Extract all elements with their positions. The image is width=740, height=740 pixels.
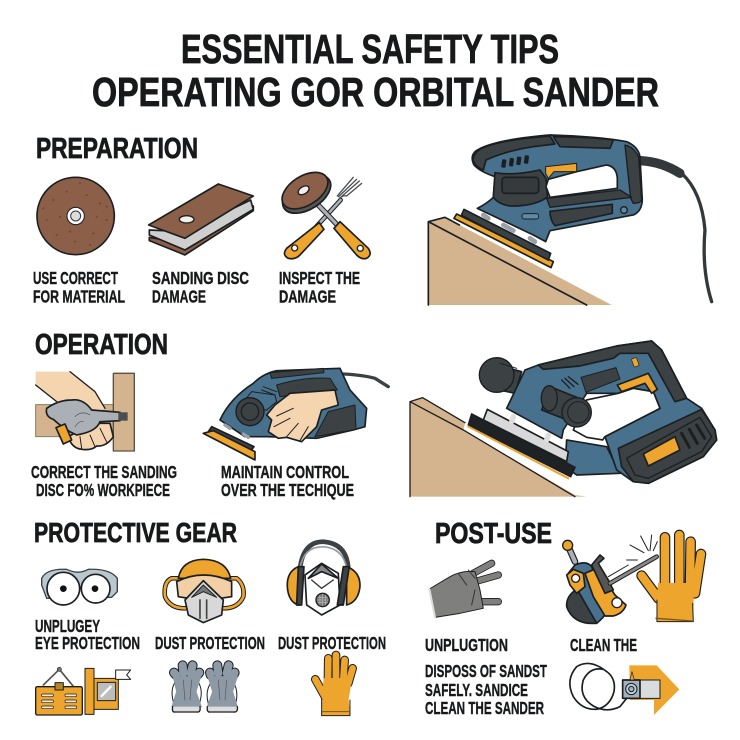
- vents and switch: [562, 357, 639, 392]
- label: sanding disc: [152, 268, 249, 306]
- label: sanding disc: SANDING DISC: [152, 268, 249, 288]
- battery pack: [618, 409, 717, 483]
- label: clean the: CLEAN THE: [570, 635, 637, 655]
- icon: inspection tools: [276, 165, 370, 259]
- icon: ear muffs and respirator: [287, 542, 360, 615]
- icon: hard hat and mask: [165, 559, 244, 623]
- heading: operation: OPERATION: [35, 329, 168, 361]
- heading: preparation: PREPARATION: [36, 133, 198, 165]
- label: eye protection: UNPLUGEY: [35, 616, 100, 636]
- label: dispose of sandpaper: CLEAN THE SANDER: [425, 698, 544, 718]
- icon: cleaning cycle arrow: [570, 663, 679, 715]
- rear knob: [479, 358, 522, 393]
- label: dispose of sandpaper: SAFELY. SANDICE: [425, 680, 528, 700]
- label: inspect the damage: DAMAGE: [279, 286, 336, 306]
- label: inspect the damage: INSPECT THE: [279, 268, 360, 288]
- trigger: [617, 373, 657, 393]
- handle opening: [573, 388, 660, 440]
- side panel: [550, 204, 612, 226]
- illustration: orbital sander on board: [428, 135, 712, 305]
- title: [92, 26, 659, 115]
- sanding plates: [468, 409, 575, 478]
- trigger: [546, 163, 577, 178]
- label: correct the sanding disc: DISC FO% WORKPIECE: [36, 480, 170, 500]
- panel: post-use: [425, 518, 701, 718]
- icon: grey glove unplugging: [429, 563, 498, 617]
- top grip: [538, 341, 687, 402]
- icon: hand on sander: [203, 368, 388, 460]
- tool body: [507, 341, 717, 483]
- label: correct the sanding disc: [31, 462, 177, 500]
- label: use correct: [33, 268, 125, 306]
- label: maintain control: OVER THE TECHIQUE: [221, 480, 354, 500]
- label: sanding disc: DAMAGE: [152, 286, 206, 306]
- handle opening: [546, 165, 617, 197]
- icon: toolbox and book: [36, 667, 131, 715]
- icon: gloved hand gripping tool: [36, 372, 134, 451]
- title: ESSENTIAL SAFETY TIPS: [181, 26, 559, 72]
- label: dispose of sandpaper: DISPOSS OF SANDST: [425, 661, 547, 681]
- label: dust protection 2: DUST PROTECTION: [278, 633, 386, 653]
- wood board: [428, 217, 612, 305]
- wood board: [410, 398, 587, 497]
- icon: sanding sheets: [149, 184, 253, 255]
- icon: cleaning tool and glove: [563, 535, 701, 623]
- sander body: [472, 135, 642, 242]
- power cord: [640, 161, 712, 302]
- label: use correct: FOR MATERIAL: [33, 286, 125, 306]
- front knob: [541, 386, 591, 427]
- panel: operation: [31, 329, 717, 500]
- label: inspect the damage: [279, 268, 360, 306]
- vents: [501, 155, 529, 168]
- heading: protective gear: PROTECTIVE GEAR: [34, 517, 237, 548]
- label: maintain control: [221, 462, 354, 500]
- label: dust protection 1: DUST PROTECTION: [155, 633, 265, 653]
- battery arm: [565, 440, 620, 475]
- motor housing: [493, 170, 547, 206]
- illustration: cordless sander on board: [410, 341, 717, 497]
- label: use correct: USE CORRECT: [33, 268, 118, 288]
- panel: preparation: [33, 133, 712, 306]
- label: eye protection: [35, 616, 140, 653]
- sanding pads: [454, 209, 553, 268]
- label: unplug: UNPLUGTION: [425, 635, 508, 655]
- rear handle dark: [625, 145, 642, 203]
- label: dispose of sandpaper: [425, 661, 547, 718]
- icon: goggles: [42, 569, 117, 605]
- icon: orange glove: [315, 655, 353, 716]
- heading: post-use: POST-USE: [435, 518, 552, 550]
- label: correct the sanding disc: CORRECT THE SANDING: [31, 462, 177, 482]
- top grip: [473, 136, 555, 170]
- label: eye protection: EYE PROTECTION: [35, 633, 140, 653]
- label: maintain control: MAINTAIN CONTROL: [221, 462, 349, 482]
- icon: sanding disc: [37, 177, 114, 255]
- icon: grey gloves: [172, 665, 237, 712]
- panel: protective gear: [34, 517, 386, 716]
